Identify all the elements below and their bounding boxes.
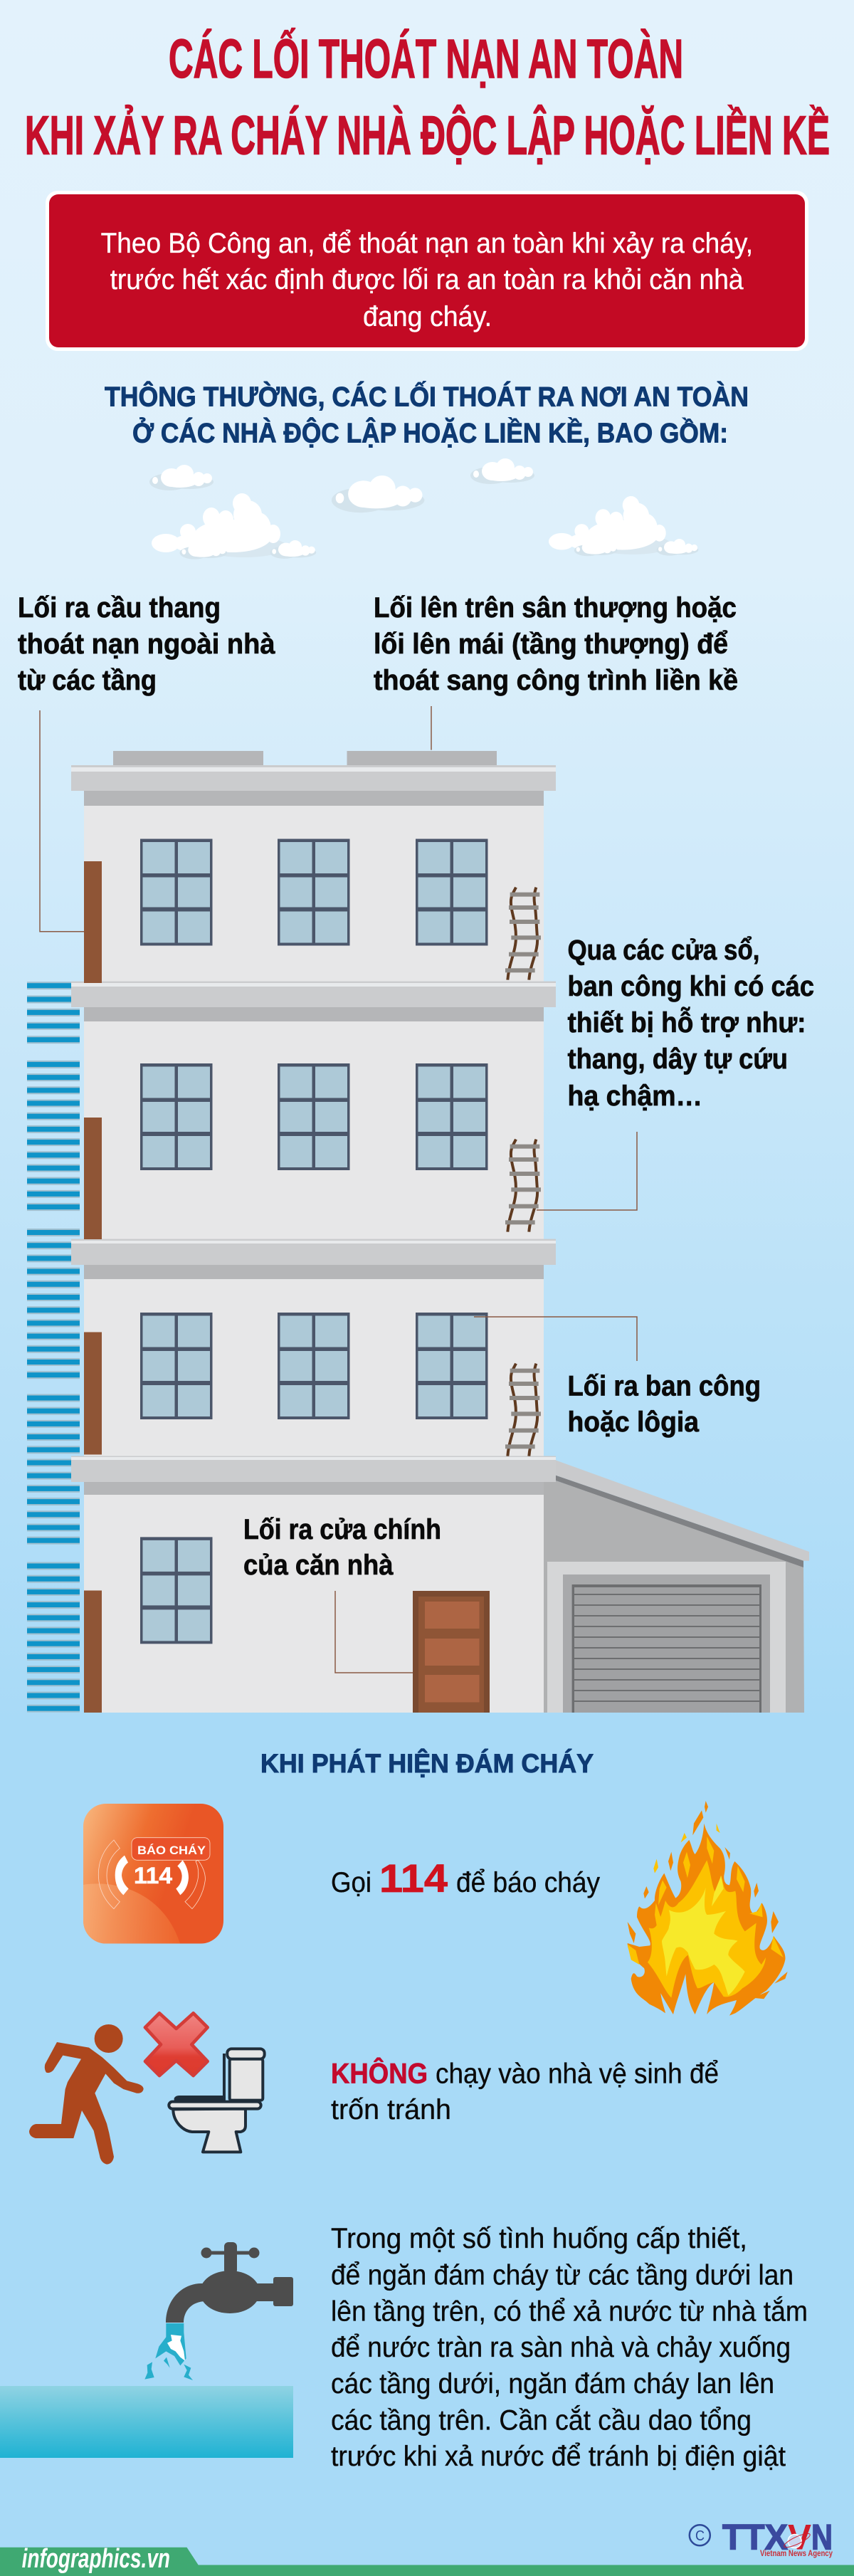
label: windows and balconies: hạ chậm… — [568, 1081, 702, 1112]
label: main door exit — [243, 1514, 441, 1581]
panel: intro callout: Theo Bộ Công an, để thoát nạn an toàn khi xảy ra cháy, — [101, 228, 753, 259]
label: windows and balconies — [568, 935, 814, 1112]
label: roof exit: thoát sang công trình liền kề — [374, 665, 738, 696]
logo: TTXVN: N — [811, 2518, 833, 2557]
text: release water — [331, 2223, 808, 2472]
logo: TTXVN: TTX — [722, 2518, 788, 2557]
panel: intro callout — [46, 191, 808, 351]
text: call 114: 114 — [379, 1856, 448, 1901]
label: exterior stairs: thoát nạn ngoài nhà — [18, 629, 275, 660]
logo: TTXVN: V — [788, 2518, 812, 2557]
floor slabs — [71, 765, 556, 1495]
garage — [544, 1461, 809, 1713]
label: roof exit — [374, 592, 738, 696]
label: balcony exit: hoặc lôgia — [568, 1407, 700, 1438]
roof vents — [113, 751, 497, 765]
heading: on detecting fire: KHI PHÁT HIỆN ĐÁM CHÁY — [260, 1748, 594, 1778]
building — [71, 751, 556, 1713]
text: release water: lên tầng trên, có thể xả nước từ nhà tắm — [331, 2295, 808, 2328]
ladders — [505, 888, 541, 1456]
icon: 114 app: BÁO CHÁY — [137, 1844, 206, 1857]
footer bar — [0, 2544, 854, 2576]
text: call 114: để báo cháy — [456, 1867, 600, 1898]
icon: red cross — [145, 2013, 208, 2076]
icon: faucet — [144, 2242, 293, 2380]
exterior staircase — [27, 982, 80, 1713]
brown pipes — [84, 861, 102, 1713]
text: release water: để ngăn đám cháy từ các tầng dưới lan — [331, 2260, 794, 2291]
panel: intro callout: trước hết xác định được lối ra an toàn ra khỏi căn nhà — [110, 264, 744, 295]
callout lines — [40, 706, 637, 1673]
logo: TTXVN — [690, 2518, 833, 2558]
heading: safe exits: Ở CÁC NHÀ ĐỘC LẬP HOẶC LIỀN KỀ, BAO GỒM: — [132, 416, 728, 448]
label: main door exit: của căn nhà — [243, 1550, 394, 1581]
windows — [140, 838, 488, 1644]
icon: flame — [628, 1801, 788, 2016]
title — [25, 28, 830, 167]
heading: safe exits: THÔNG THƯỜNG, CÁC LỐI THOÁT RA NƠI AN TOÀN — [105, 380, 749, 413]
label: exterior stairs: Lối ra cầu thang — [18, 592, 221, 624]
logo: TTXVN: C — [695, 2528, 705, 2544]
text: release water: để nước tràn ra sàn nhà và chảy xuống — [331, 2332, 791, 2363]
icon: 114 app: 114 — [134, 1863, 172, 1888]
walls — [84, 806, 544, 1713]
icon: water pool — [0, 2386, 293, 2458]
text: do not run to the toilet — [331, 2057, 719, 2125]
text: call 114: Gọi — [331, 1867, 371, 1898]
icon: 114 app — [83, 1804, 223, 1943]
label: roof exit: lối lên mái (tầng thượng) để — [374, 629, 728, 660]
text: release water: các tầng dưới, ngăn đám cháy lan lên — [331, 2368, 774, 2399]
label: windows and balconies: Qua các cửa sổ, — [568, 935, 760, 966]
label: windows and balconies: ban công khi có các — [568, 971, 814, 1002]
label: balcony exit — [568, 1371, 761, 1438]
text: release water: trước khi xả nước để tránh bị điện giật — [331, 2441, 786, 2472]
text: do not run to the toilet: chạy vào nhà vệ sinh để — [436, 2059, 719, 2090]
label: windows and balconies: thang, dây tự cứu — [568, 1043, 788, 1075]
text: call 114 — [331, 1856, 600, 1901]
text: do not run to the toilet: KHÔNG — [331, 2057, 428, 2090]
door — [413, 1591, 490, 1713]
icon: running person — [29, 2024, 144, 2165]
logo: TTXVN: Vietnam News Agency — [760, 2550, 833, 2558]
icon: toilet — [169, 2049, 265, 2152]
label: balcony exit: Lối ra ban công — [568, 1371, 761, 1402]
label: main door exit: Lối ra cửa chính — [243, 1514, 441, 1545]
label: exterior stairs: từ các tầng — [18, 665, 157, 696]
label: windows and balconies: thiết bị hỗ trợ như: — [568, 1006, 806, 1039]
heading: safe exits — [105, 380, 749, 448]
panel: intro callout: đang cháy. — [363, 301, 492, 332]
footer bar: infographics.vn — [22, 2544, 170, 2574]
label: exterior stairs — [18, 592, 275, 696]
label: roof exit: Lối lên trên sân thượng hoặc — [374, 592, 737, 624]
clouds — [149, 458, 698, 559]
text: release water: các tầng trên. Cần cắt cầu dao tổng — [331, 2404, 752, 2436]
text: release water: Trong một số tình huống cấp thiết, — [331, 2223, 747, 2254]
text: do not run to the toilet: trốn tránh — [331, 2094, 451, 2125]
